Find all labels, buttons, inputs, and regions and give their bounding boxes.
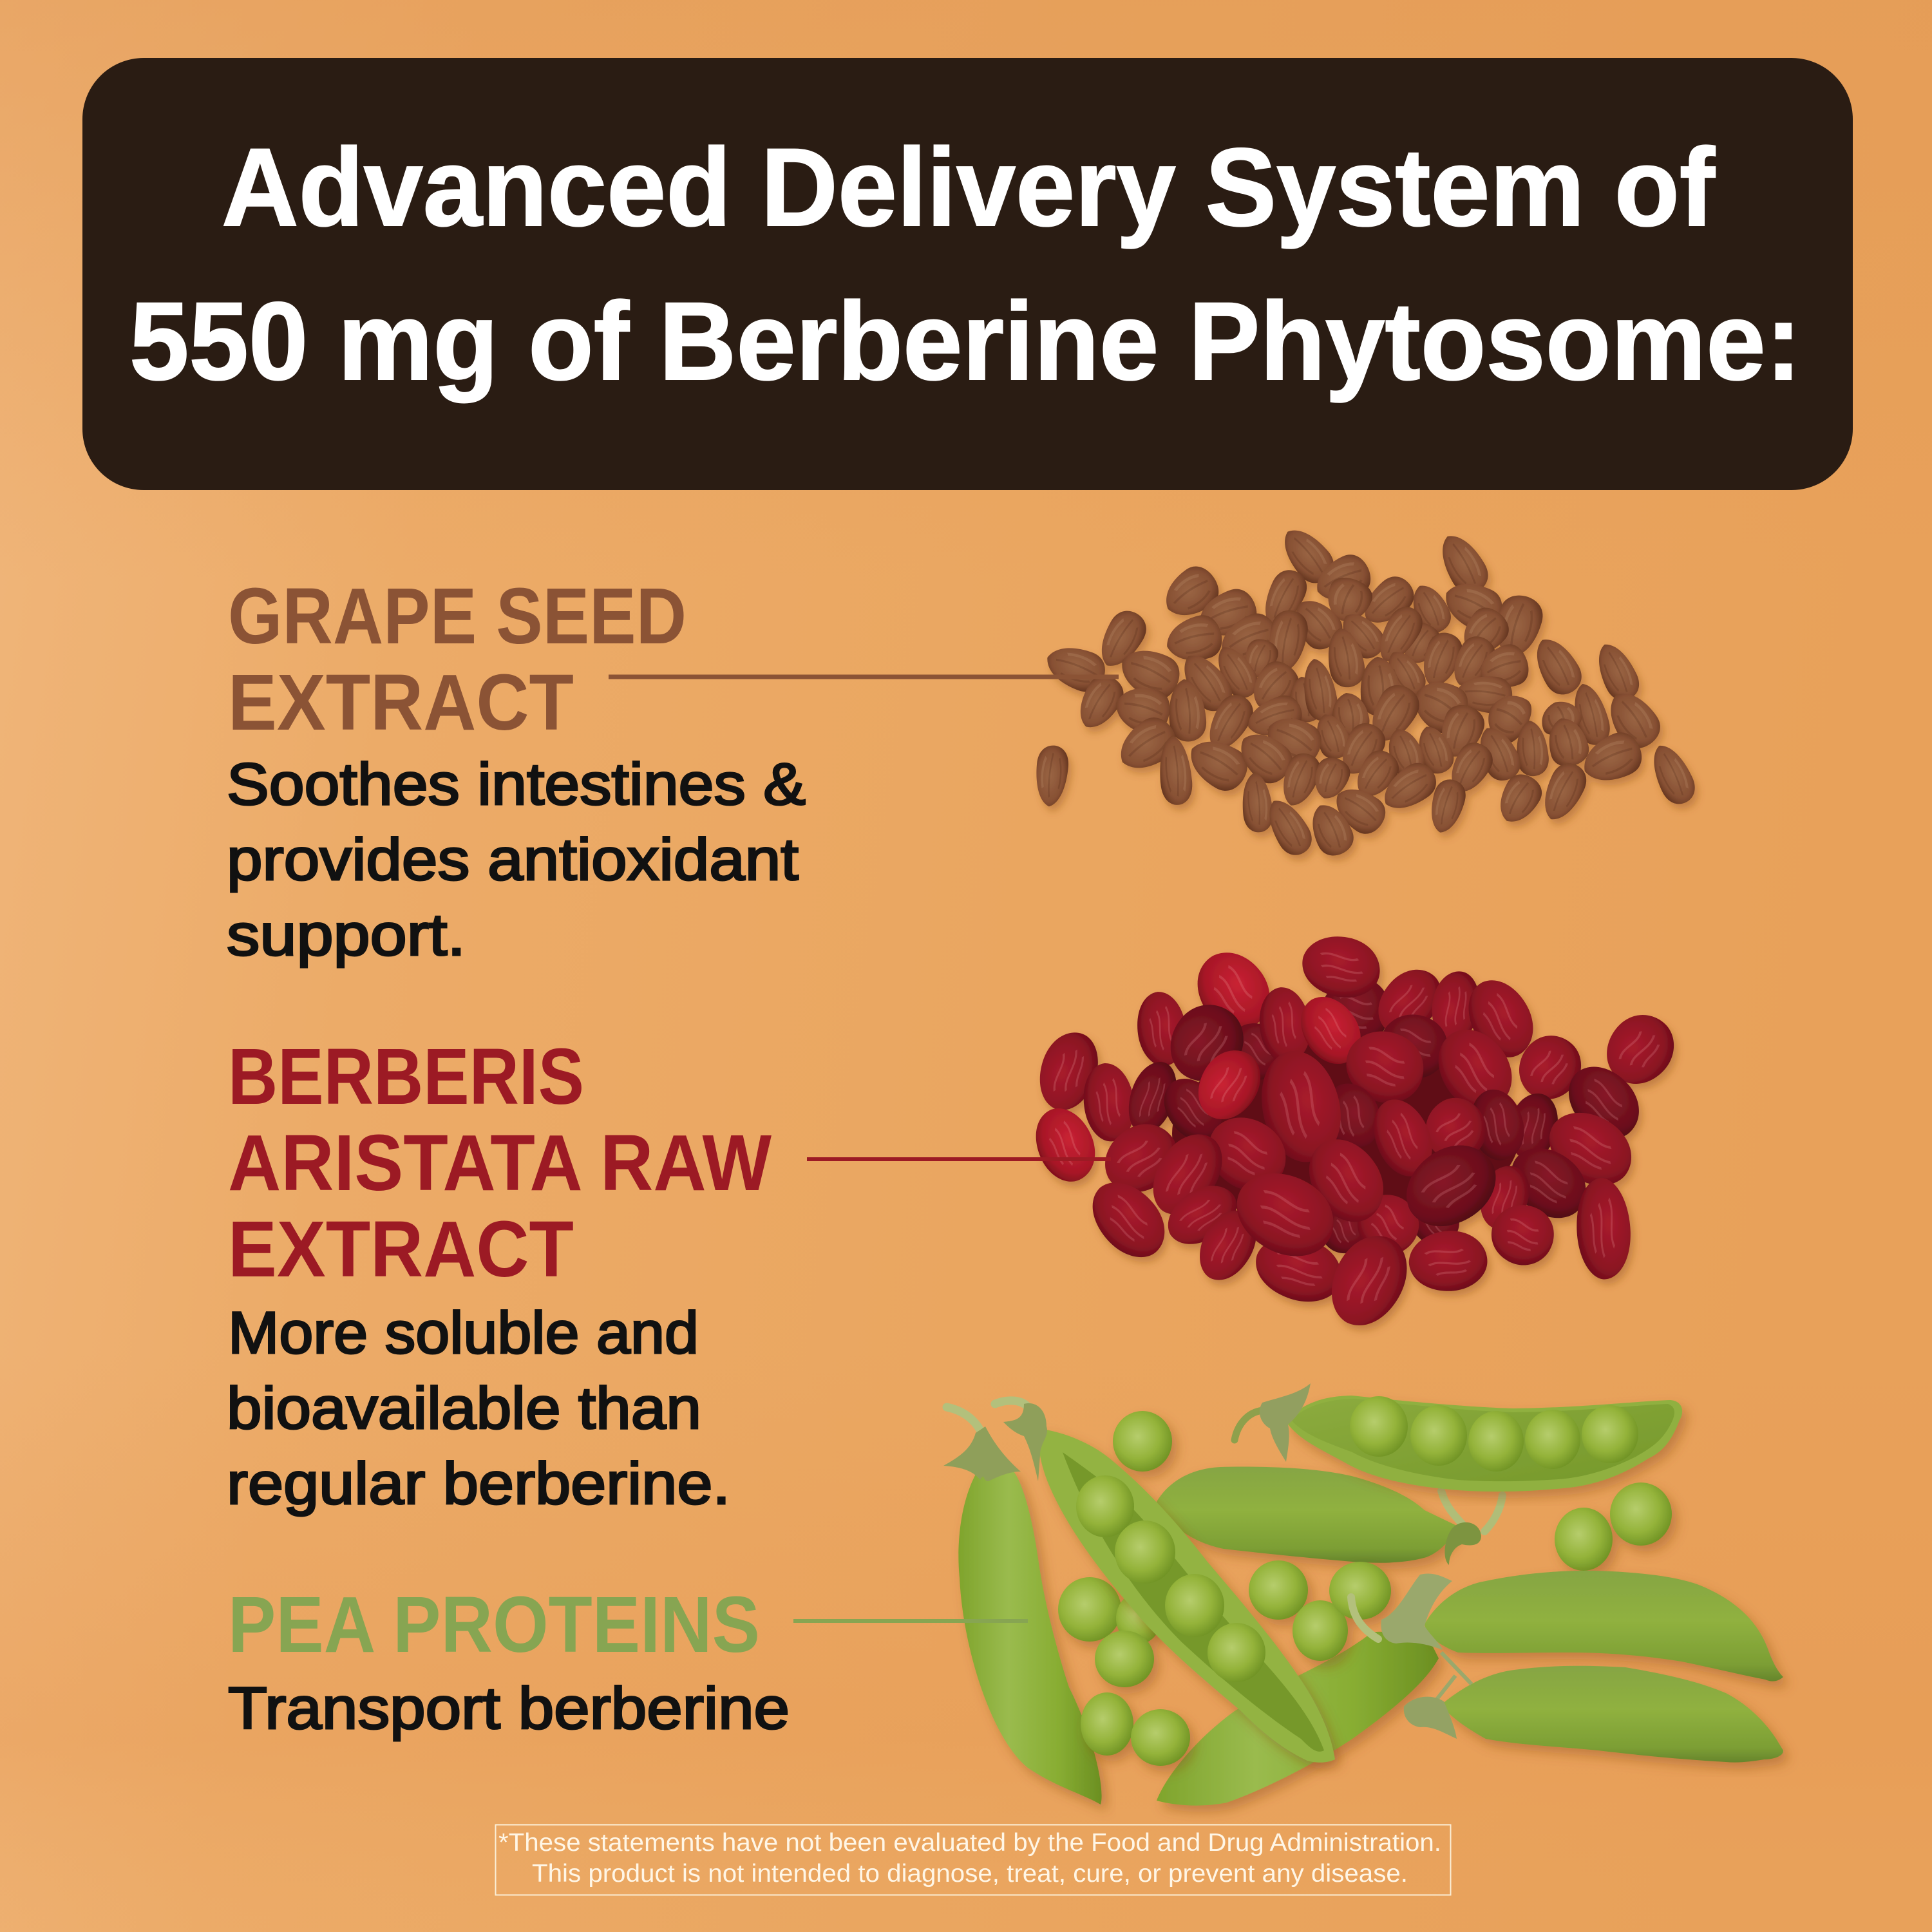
- heading: berberis aristata raw extract: BERBERIS: [228, 1033, 584, 1121]
- pod: long left: [958, 1462, 1102, 1804]
- heading: berberis aristata raw extract: EXTRACT: [228, 1206, 574, 1294]
- leader line: pea proteins: [793, 1619, 1028, 1623]
- pod: diagonal behind: [1157, 1632, 1439, 1806]
- heading: grape seed extract: [228, 573, 687, 747]
- illustration: grape seeds: [1033, 520, 1701, 861]
- pod: middle upper: [1157, 1467, 1458, 1563]
- text: grape seed description: support.: [227, 902, 466, 968]
- loose peas: centre and lower left: [1058, 1560, 1391, 1766]
- text: grape seed description: Soothes intestines &: [227, 752, 806, 817]
- text: pea proteins description: Transport berberine: [228, 1676, 790, 1741]
- title line 1: Advanced Delivery System of: [222, 126, 1716, 249]
- title line 2: 550 mg of Berberine Phytosome:: [129, 279, 1801, 403]
- pod: right upper: [1425, 1571, 1783, 1681]
- text: grape seed description: [227, 752, 806, 968]
- text: berberis description: bioavailable than: [227, 1376, 701, 1441]
- heading: pea proteins: PEA PROTEINS: [228, 1581, 760, 1669]
- calyx: open top right pod: [1235, 1383, 1311, 1462]
- pod: right lower: [1441, 1666, 1783, 1763]
- peas in top right pod: [1350, 1396, 1638, 1472]
- text: grape seed description: provides antioxidant: [227, 827, 799, 893]
- disclaimer box: [496, 1825, 1450, 1895]
- text: berberis description: More soluble and: [228, 1300, 699, 1366]
- disclaimer line 1: *These statements have not been evaluated by the Food and Drug Administration.: [498, 1829, 1441, 1857]
- calyx: right upper pod: [1351, 1573, 1452, 1650]
- text: berberis description: regular berberine.: [227, 1451, 730, 1517]
- stem: middle pod: [1441, 1491, 1502, 1565]
- illustration: pea pods: [943, 1383, 1783, 1806]
- calyx: centre pod: [995, 1401, 1047, 1481]
- calyx: long left pod: [943, 1407, 1021, 1481]
- text: berberis description: [227, 1300, 730, 1517]
- calyx: right lower pod: [1404, 1653, 1472, 1739]
- title banner: [82, 58, 1853, 490]
- pod: open top right: [1285, 1396, 1682, 1492]
- heading: grape seed extract: EXTRACT: [228, 659, 574, 747]
- heading: berberis aristata raw extract: [228, 1033, 772, 1294]
- peas in centre pod: [1076, 1475, 1265, 1682]
- heading: grape seed extract: GRAPE SEED: [228, 573, 687, 661]
- leader line: grape seed: [609, 675, 1119, 679]
- leader line: berberis: [807, 1157, 1111, 1161]
- disclaimer line 2: This product is not intended to diagnose, treat, cure, or prevent any disease.: [532, 1860, 1408, 1888]
- illustration: berberis berries: [1027, 927, 1688, 1339]
- loose peas: upper and right: [1113, 1411, 1672, 1571]
- heading: berberis aristata raw extract: ARISTATA RAW: [228, 1119, 772, 1208]
- pod: open centre: [1038, 1428, 1335, 1763]
